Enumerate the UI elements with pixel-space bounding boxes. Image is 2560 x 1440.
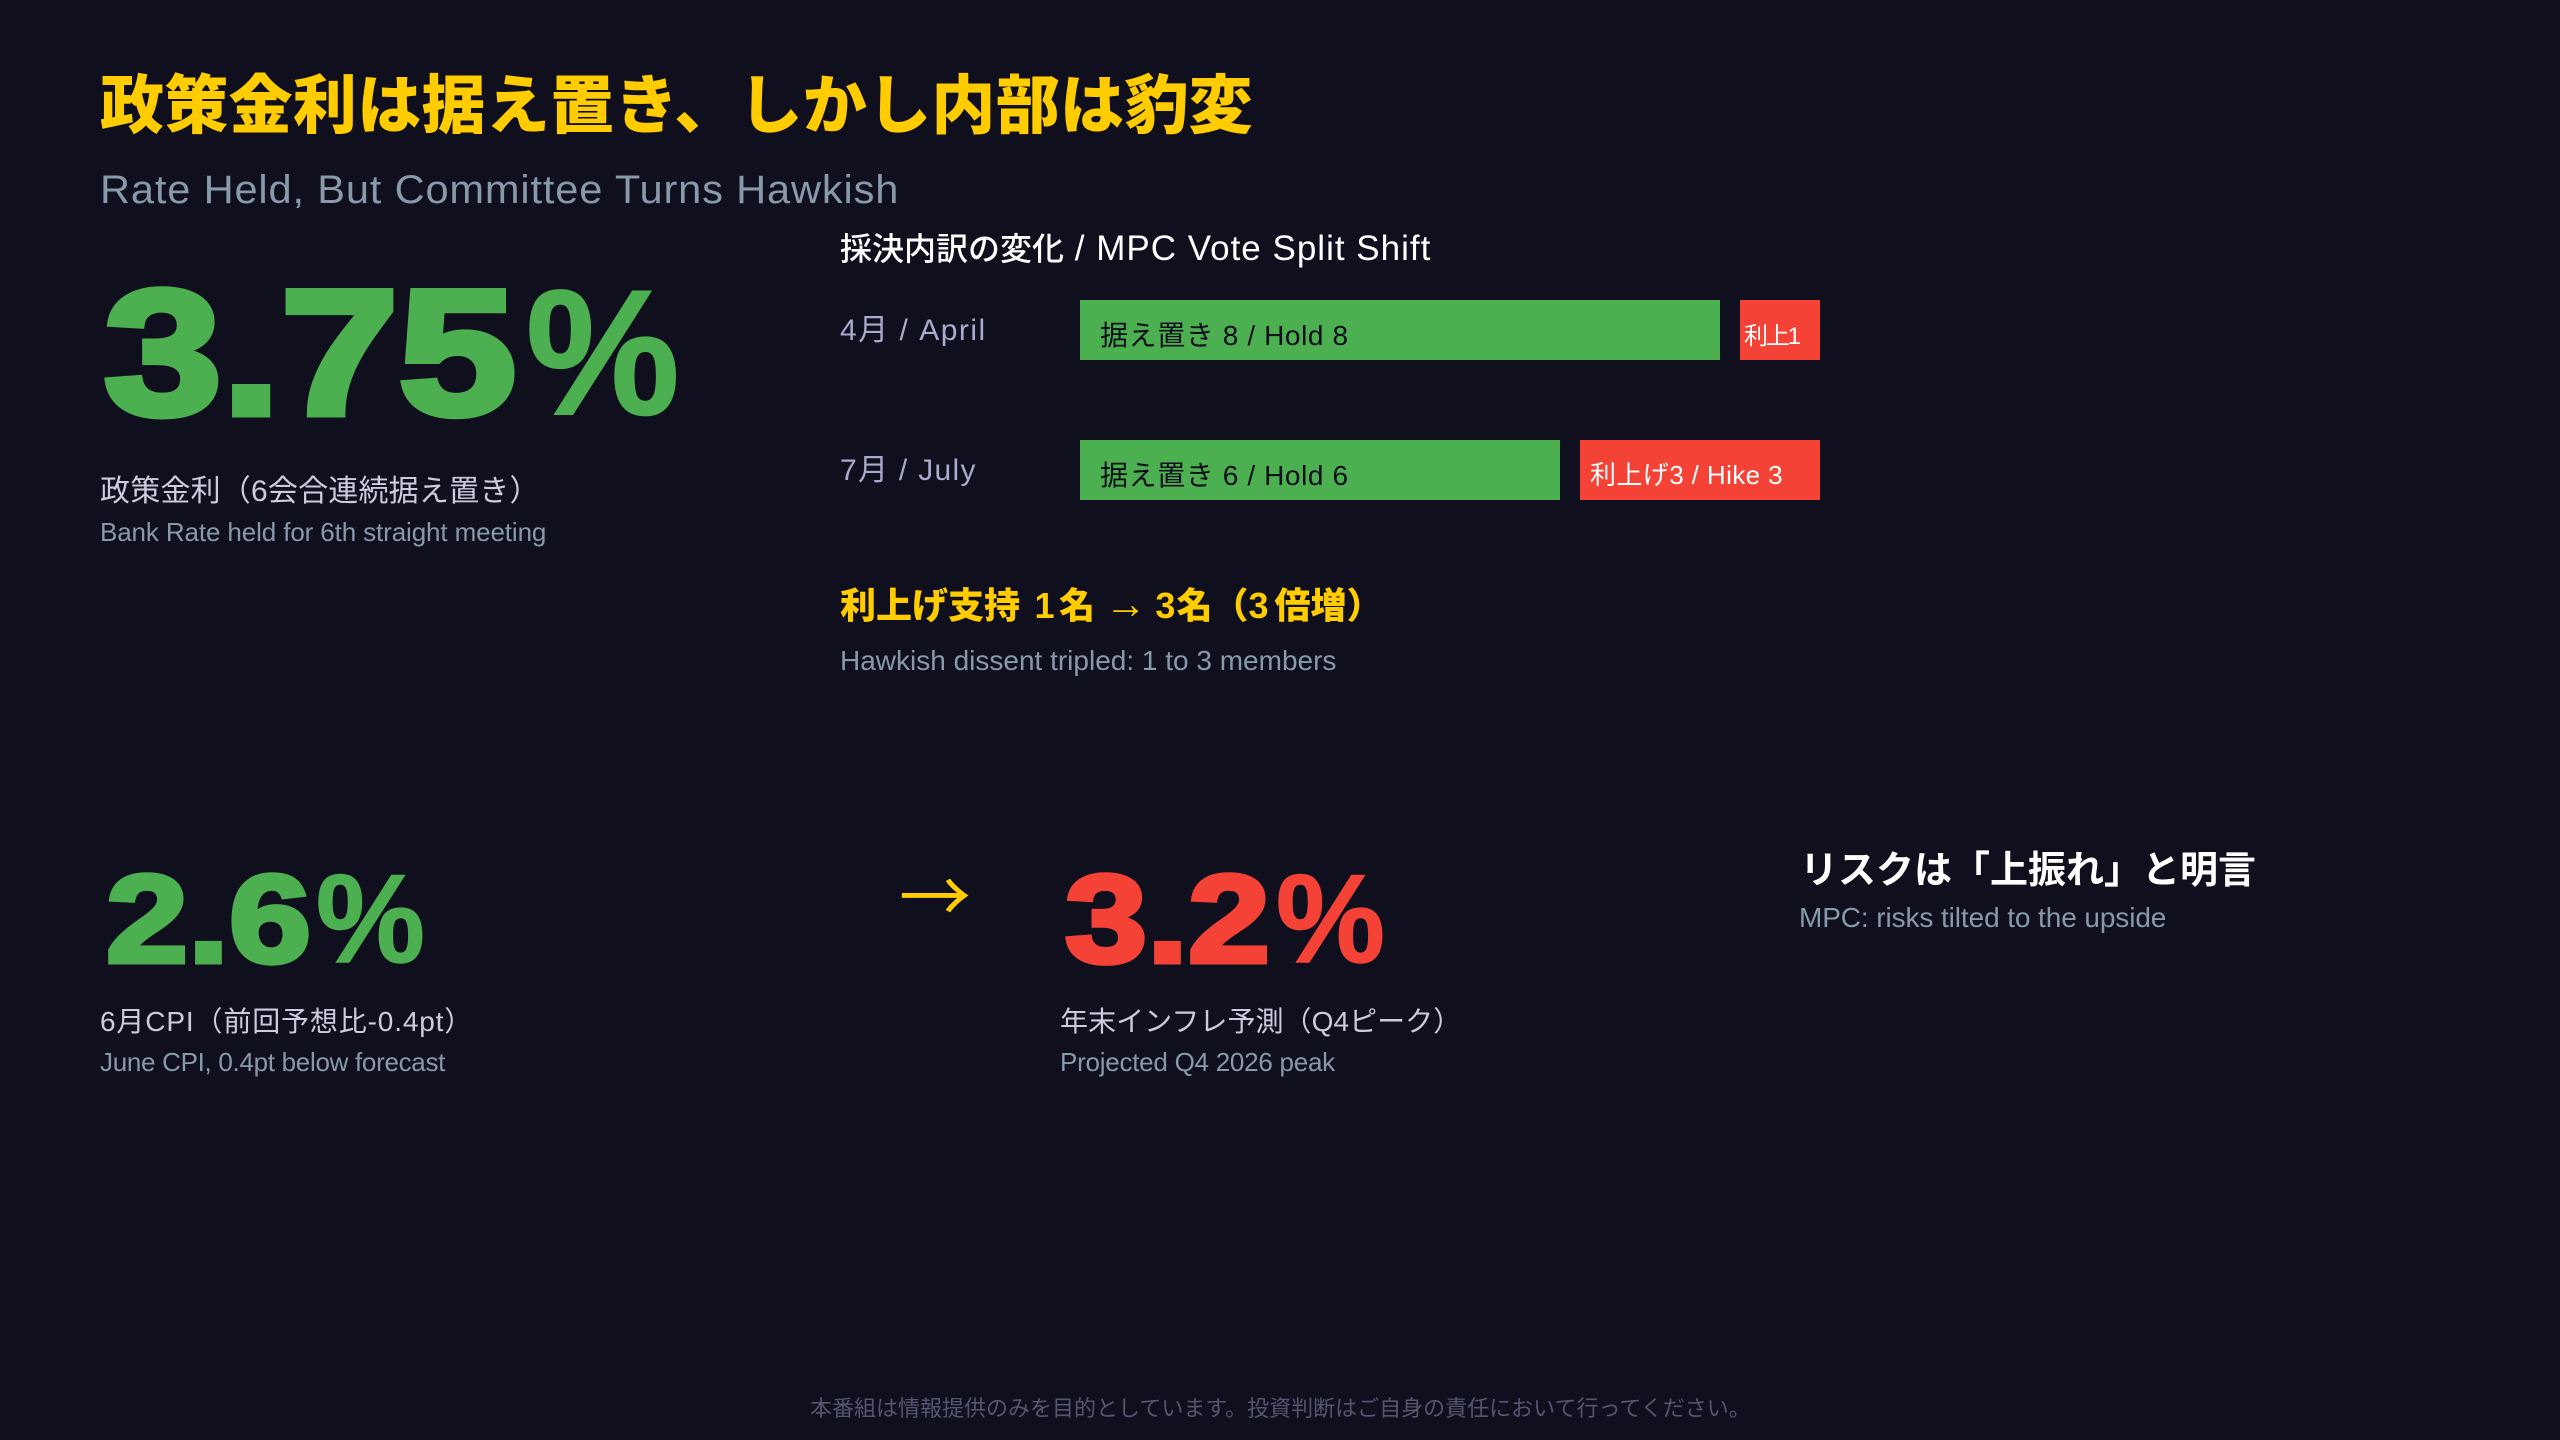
CPI sublabel: June CPI, 0.4pt below forecast (100, 1047, 445, 1077)
big number: 3.75%: % (526, 253, 680, 452)
big number: 3.75%: 3.75 (104, 253, 516, 452)
April hold bar: 8 (1080, 300, 1720, 360)
July hike bar: 3 (1580, 440, 1820, 500)
panel: policy rate (100, 253, 680, 547)
row: April (840, 300, 1820, 360)
April hike bar: 1 (1740, 300, 1820, 360)
subtitle: Rate Held, But Committee Turns Hawkish (100, 168, 899, 212)
panel: June CPI (100, 850, 473, 1077)
big number: 2.6%: % (316, 850, 425, 989)
title: 政策金利は据え置き、しかし内部は豹変 (100, 70, 1253, 142)
risk heading: リスクは「上振れ」と明言 (1800, 850, 2256, 892)
July hold bar: 6 (1080, 440, 1560, 500)
row: July (840, 440, 1820, 500)
panel: upside risk (1799, 850, 2256, 933)
arrow: → (899, 839, 971, 944)
policy rate label: 政策金利（6会合連続据え置き） (100, 475, 540, 508)
dissent callout: 利上げ支持 1名 → 3名（3倍増） (840, 580, 1382, 627)
forecast label: 年末インフレ予測（Q4ピーク） (1060, 1006, 1461, 1037)
forecast sublabel: Projected Q4 2026 peak (1060, 1047, 1335, 1077)
big number: 3.2%: % (1276, 850, 1385, 989)
risk sublabel: MPC: risks tilted to the upside (1799, 902, 2166, 933)
big number: 2.6%: 2.6 (106, 850, 311, 989)
CPI label: 6月CPI（前回予想比-0.4pt） (100, 1006, 473, 1037)
footer disclaimer: 本番組は情報提供のみを目的としています。投資判断はご自身の責任において行ってください。 (810, 1396, 1751, 1421)
July hold bar: 6: 据え置き 6 / Hold 6 (1100, 460, 1349, 491)
April hold bar: 8: 据え置き 8 / Hold 8 (1100, 320, 1349, 351)
dissent sublabel: Hawkish dissent tripled: 1 to 3 members (840, 645, 1336, 676)
panel: vote split (840, 229, 1820, 676)
July hike bar: 3: 利上げ3 / Hike 3 (1590, 460, 1783, 490)
April hike bar: 1: 利上1 (1744, 323, 1799, 350)
panel: year-end inflation forecast (1060, 850, 1461, 1077)
big number: 3.2% (1065, 850, 1385, 989)
big number: 3.2%: 3.2 (1065, 850, 1270, 989)
big number: 2.6% (106, 850, 425, 989)
vote split heading: 採決内訳の変化 / MPC Vote Split Shift (840, 229, 1431, 268)
April label: 4月 / April (840, 314, 987, 347)
policy rate sublabel: Bank Rate held for 6th straight meeting (100, 517, 546, 547)
July label: 7月 / July (840, 454, 977, 487)
